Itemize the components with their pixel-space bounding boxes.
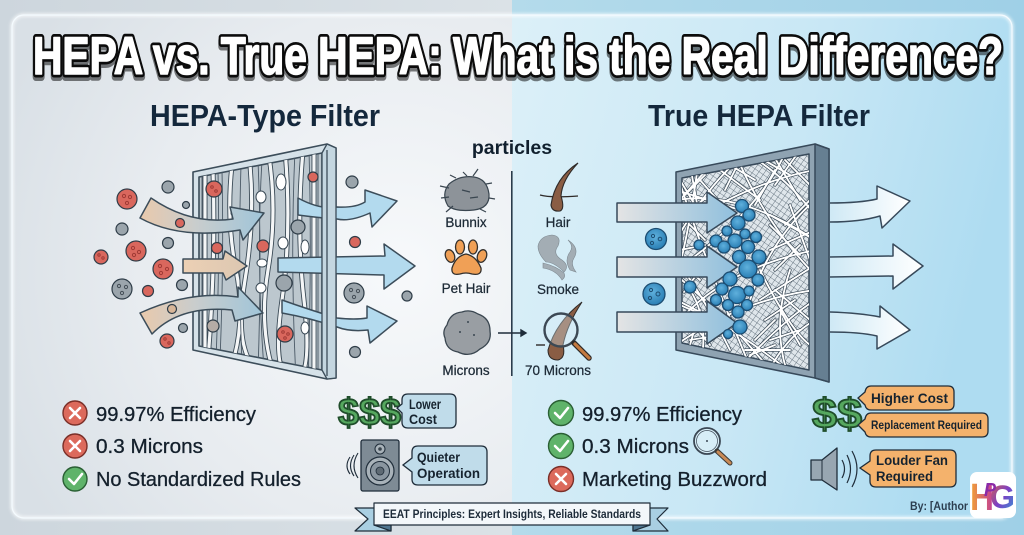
outgoing arrows <box>278 190 415 343</box>
callout: lower cost: Lower <box>409 397 442 412</box>
icon: magnifier <box>694 428 730 463</box>
icon: HPG logo: H <box>970 477 994 519</box>
label: Hair: Hair <box>546 215 571 230</box>
icon: HPG logo: P <box>984 480 997 500</box>
label: Microns: Microns <box>442 363 490 378</box>
item: microns <box>548 434 689 458</box>
icon: magnifier over hair <box>536 302 589 360</box>
panel: True HEPA filter illustration <box>617 140 923 390</box>
center divider <box>511 171 513 376</box>
icon: two dollar signs: $$ <box>812 390 862 437</box>
icon: bunnix dust <box>440 169 495 212</box>
item: no rules: No Standardized Rules <box>96 469 301 491</box>
icon: smoke <box>538 235 576 280</box>
incoming arrows <box>617 192 737 344</box>
panel: particles comparison <box>440 137 591 378</box>
frame right bar over arrows <box>322 144 336 379</box>
callout: higher cost: Higher Cost <box>871 390 948 406</box>
item: microns: 0.3 Microns <box>96 436 203 458</box>
item: efficiency: 99.97% Efficiency <box>582 404 742 426</box>
callout: louder fan required: Louder Fan <box>876 453 948 468</box>
arrow: microns to 70 microns <box>498 330 526 336</box>
item: microns <box>63 434 203 458</box>
callout: replacement required <box>858 413 988 437</box>
label: Smoke: Smoke <box>537 282 579 297</box>
outgoing arrows <box>830 186 923 349</box>
icon: loud speaker <box>811 448 857 490</box>
gray particles <box>112 176 412 358</box>
callout: higher cost <box>858 386 954 410</box>
label: Pet Hair: Pet Hair <box>442 281 491 296</box>
callout: louder fan required: Required <box>876 469 933 484</box>
trapped particles <box>643 200 766 338</box>
icon: HPG logo: G <box>990 479 1015 515</box>
icon: three dollar signs: $$$ <box>338 392 401 434</box>
filter frame left <box>193 144 336 379</box>
filter frame right <box>676 144 829 382</box>
callout: louder fan required <box>860 450 956 487</box>
ribbon banner: EEAT Principles: Expert Insights, Reliable Standards <box>383 507 641 521</box>
icon: speaker box <box>347 440 399 491</box>
callout: lower cost: Cost <box>409 412 437 427</box>
heading: True HEPA Filter: True HEPA Filter <box>648 98 870 133</box>
callout: lower cost <box>397 394 456 428</box>
coarse fibers <box>202 150 318 380</box>
panel: HEPA-type checklist <box>63 401 301 491</box>
icon: HPG logo <box>970 472 1016 519</box>
panel: HEPA-type filter illustration <box>94 144 415 380</box>
byline: By: [Author <box>910 499 968 513</box>
item: microns: 0.3 Microns <box>582 436 689 458</box>
callout: quieter operation <box>403 446 487 485</box>
free particle nuclei <box>648 234 662 300</box>
red particle nuclei <box>98 186 289 344</box>
dense mesh fibers <box>682 156 809 366</box>
callout: replacement required: Replacement Required <box>871 420 982 432</box>
heading: HEPA-Type Filter: HEPA-Type Filter <box>150 98 380 133</box>
label: 70 Microns: 70 Microns <box>525 363 591 378</box>
incoming arrows <box>140 198 264 334</box>
callout: quieter operation: Quieter <box>417 450 461 465</box>
icon: microns blob <box>444 311 490 354</box>
callout: quieter operation: Operation <box>417 466 480 481</box>
red particles <box>94 172 360 348</box>
item: buzzword: Marketing Buzzword <box>582 469 767 491</box>
label: Bunnix: Bunnix <box>445 215 487 230</box>
gray particle nuclei <box>117 284 360 299</box>
icon: pet paw <box>444 240 488 274</box>
item: efficiency: 99.97% Efficiency <box>96 404 256 426</box>
icon: hair <box>540 163 578 211</box>
ribbon banner <box>355 503 668 531</box>
particles heading: particles <box>472 137 552 159</box>
panel: True HEPA checklist <box>548 400 767 492</box>
